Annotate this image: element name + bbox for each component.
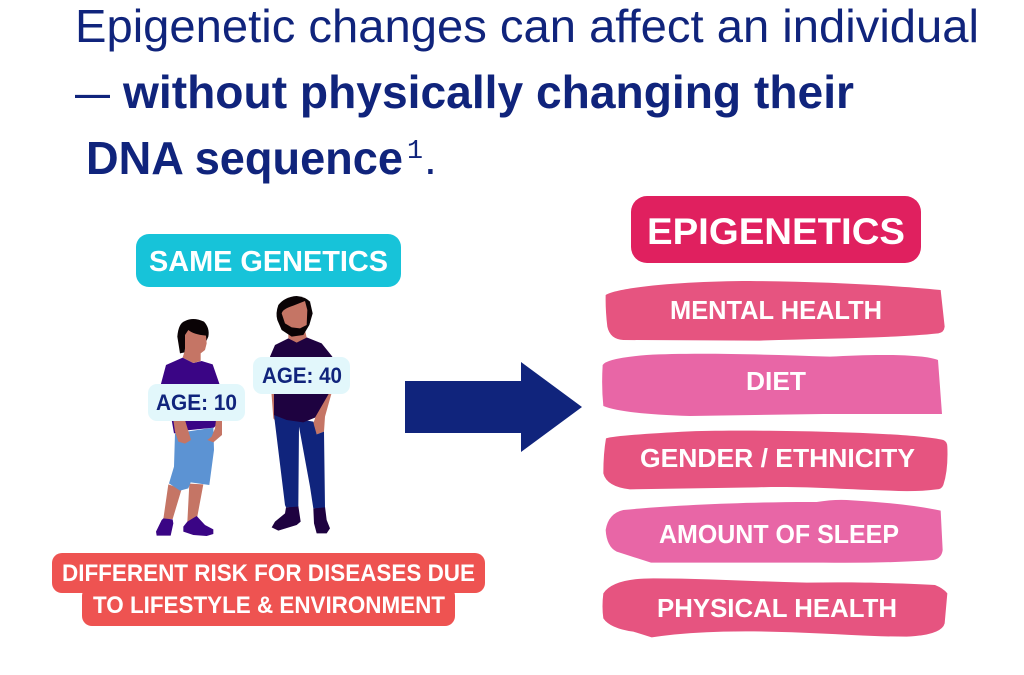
title: DNA sequence — [86, 132, 403, 184]
epigenetics heading: EPIGENETICS — [647, 211, 905, 252]
title: . — [424, 132, 437, 184]
adult jeans — [274, 415, 325, 508]
age 40 badge — [253, 357, 350, 394]
same genetics label: SAME GENETICS — [149, 246, 388, 278]
factor: mental health: MENTAL HEALTH — [670, 295, 882, 325]
adult shoes — [272, 506, 330, 533]
adult hair and beard — [277, 296, 313, 337]
child legs — [163, 484, 203, 522]
factor: amount of sleep — [606, 500, 943, 563]
age 40 badge: AGE: 40 — [262, 363, 342, 388]
title: Epigenetic changes can affect an individual — [75, 0, 979, 52]
factor: physical health: PHYSICAL HEALTH — [657, 593, 897, 623]
child hands — [173, 420, 222, 444]
child shorts — [169, 428, 214, 491]
same genetics label — [136, 234, 401, 287]
title: 1 — [407, 137, 423, 167]
different risk label: TO LIFESTYLE & ENVIRONMENT — [93, 592, 445, 619]
different risk label: DIFFERENT RISK FOR DISEASES DUE — [62, 560, 475, 587]
factor: gender / ethnicity — [603, 431, 947, 491]
child hair — [177, 319, 209, 353]
age 10 badge — [148, 384, 245, 421]
factor: diet: DIET — [746, 366, 806, 396]
child shoes — [156, 516, 213, 536]
adult neck — [288, 330, 307, 343]
adult shirt — [270, 337, 332, 422]
adult face — [282, 301, 307, 328]
figure: adult age 40 — [270, 296, 332, 533]
title: without physically changing their — [122, 66, 854, 118]
child shirt — [161, 358, 221, 433]
title — [75, 0, 979, 184]
factor: diet — [602, 354, 942, 416]
age 10 badge: AGE: 10 — [156, 390, 237, 415]
child face and neck — [183, 330, 207, 363]
factor: mental health — [606, 281, 945, 341]
factor: physical health — [602, 578, 947, 637]
adult arms — [271, 392, 332, 434]
title: — — [75, 66, 110, 118]
factor: gender / ethnicity: GENDER / ETHNICITY — [640, 443, 915, 473]
different risk label — [52, 553, 485, 626]
factor: amount of sleep: AMOUNT OF SLEEP — [659, 519, 899, 549]
epigenetics heading — [631, 196, 921, 263]
figure: child age 10 — [156, 319, 222, 536]
arrow — [405, 362, 582, 452]
